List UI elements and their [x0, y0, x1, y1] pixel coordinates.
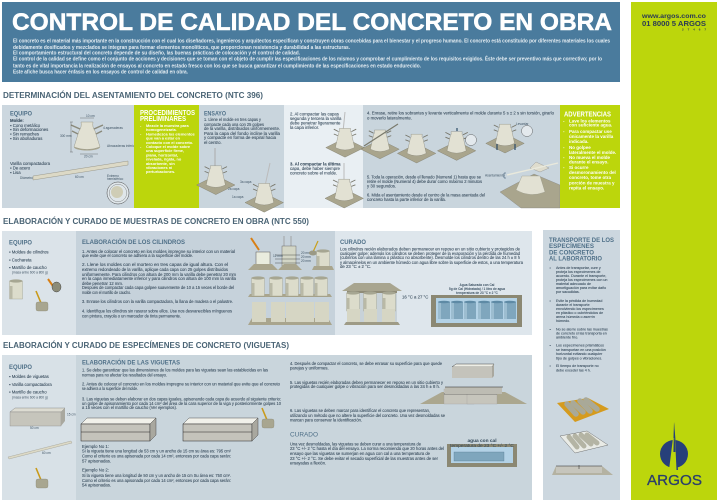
icon: two-layer beam A — [81, 418, 156, 441]
panel: equipo — [9, 240, 61, 311]
transport bullet list: Evite la pérdida de humedad — [556, 299, 602, 303]
panel: cylinder samples — [2, 231, 532, 335]
text: elaboración de las viguetas: Ejemplo No 2: — [82, 468, 109, 472]
icon: beam mold: 15 cm — [67, 412, 76, 416]
text: elaboración de los cilindros: ELABORACIÓN DE LOS CILINDROS — [82, 237, 186, 246]
text: steps 4 to 6: 4. Después de compactar el concreto, se debe enrasar su superficie para que quede — [290, 361, 443, 366]
transport title — [549, 237, 614, 262]
icon: row of cylinders on base — [248, 302, 332, 325]
icon: rod end detail: hemisférico — [107, 177, 124, 181]
icon: layers cross section: 1a capa — [232, 195, 244, 199]
introduction text: tanto es de vital importancia la realización de ensayos al concreto en estado fresco con los que se busca garantizar el cumplimiento de las especificaciones en estado endurecido. — [13, 63, 422, 69]
panel: equipo: ▪ Martillo de caucho — [9, 265, 47, 270]
transport bullet list: amortiguación para evitar daño — [556, 286, 606, 290]
panel: ensayo step 1: ENSAYO — [204, 110, 226, 118]
transport bullet list: húmedo. — [556, 319, 570, 323]
contact details — [641, 14, 706, 32]
panel: equipo: ▪ Moldes de cilindros — [9, 249, 48, 254]
panel: advertencias: únicamente la varilla — [569, 134, 614, 139]
text: elaboración de las viguetas: se adhiera a la superficie del molde. — [82, 386, 138, 391]
icon: filling first mold — [248, 238, 278, 270]
panel: procedimientos preliminares: Humedezca los elementos — [146, 131, 195, 136]
text: curado viguetas: 23 °C +/- 2 °C hasta el día del ensayo. La norma recomienda que 20 horas antes del — [290, 446, 444, 451]
panel: equipo: ▪ De acero — [10, 166, 31, 170]
panel: advertencias: - — [563, 129, 565, 134]
icon: hold cone with rotation dial — [437, 128, 476, 160]
introduction text: El comportamiento estructural del concreto depende de su diseño, las buenas prácticas de colocación y el control de calidad. — [13, 51, 301, 57]
icon: mold cone: 10 cm — [86, 114, 95, 118]
text: elaboración de las viguetas: 54 apisonadas. — [82, 482, 111, 488]
transport title: DE CONCRETO — [549, 250, 594, 256]
text: steps 4 to 6: utilizando un método que no altere la superficie del concreto. Una vez desmoldadas se — [290, 413, 446, 418]
panel: equipo: Varilla compactadora — [10, 161, 51, 166]
illustration: beam curing tank: agua con cal — [467, 438, 497, 444]
contact details: www.argos.com.co — [641, 14, 706, 20]
text: curado viguetas — [290, 432, 444, 466]
panel: equipo: ▪ Lisa — [10, 170, 21, 175]
transport bullet list: horizontal evitando cualquier — [556, 352, 603, 356]
panel: procedimientos preliminares: PRELIMINARES — [140, 114, 186, 123]
panel: ensayo steps 4 to 6: y 30 segundos. — [367, 184, 396, 188]
transport bullet list: El tiempo de transporte no — [556, 364, 599, 368]
panel: equipo: ▪ Sin remaches — [10, 131, 39, 136]
introduction text — [13, 38, 610, 75]
icon: tamping rod: 60 cm — [42, 451, 51, 455]
text: elaboración de las viguetas: ELABORACIÓN DE LAS VIGUETAS — [82, 358, 181, 366]
panel: procedimientos preliminares: PROCEDIMIENTOS — [140, 108, 195, 117]
panel: equipo: ▪ Sin deformaciones — [10, 127, 48, 132]
text: steps 4 to 6 — [290, 361, 446, 422]
icon: beams on base — [552, 465, 613, 475]
transport bullet list: • — [550, 364, 552, 368]
text: elaboración de los cilindros: en la capa inmediatamente inferior y para cilindros con altura de 100 mm la varilla — [82, 276, 237, 281]
text: elaboración de las viguetas: 57 apisonadas. — [82, 458, 111, 464]
icon: Argos logo — [647, 422, 702, 489]
icon: rodding third layer — [325, 163, 363, 208]
icon: two-layer beam B — [183, 418, 258, 441]
main title: CONTROL DE CALIDAD DEL CONCRETO EN OBRA — [12, 9, 612, 36]
panel: ensayo step 1: Para la capa del fondo incline la varilla — [204, 131, 281, 136]
panel: procedimientos preliminares: vibraciones ni — [146, 165, 172, 170]
text: elaboración de las viguetas: 3. Las viguetas se deben elaborar en dos capas iguales, apisonando cada capa de acuerdo al siguiente criterio: — [82, 396, 281, 402]
icon: rod in cylinder: 20 mm — [301, 251, 311, 255]
panel: equipo: ▪ Cono metálico — [10, 123, 41, 128]
icon: cylinder mold — [10, 279, 22, 299]
text: curado cilindros — [340, 239, 524, 269]
text: curado viguetas: Una vez desmoldadas, las viguetas se deben curar a una temperatura de — [290, 442, 422, 446]
panel: ensayo steps 4 to 6: o moverlo lateralmente. — [367, 116, 412, 120]
introduction text: El control de la calidad se define como el conjunto de acciones y decisiones que se toman con el objeto de cumplir las especificaciones de los mismos y comprobar el cumplimiento de los requisitos exigidos. Éste debe ser preventivo más que correctivo; por lo — [13, 54, 602, 62]
icon: beam mold: 50 cm — [30, 426, 39, 430]
panel: advertencias: con suficiente agua. — [569, 122, 612, 128]
icon: strike off cone — [361, 124, 399, 159]
icon: beam mold — [10, 408, 76, 430]
panel: ensayo step 1: compacte cada una con 25 golpes — [204, 122, 264, 127]
transport bullet list: ambiente frío. — [556, 336, 578, 340]
text: steps 4 to 6: marcan para conservar la identificación. — [290, 418, 362, 422]
panel: advertencias: - — [563, 118, 565, 123]
icon: layers cross section: 2a capa — [228, 187, 240, 191]
transport bullet list: en plástico o cubriéndolos de — [556, 311, 603, 315]
text: elaboración de los cilindros: uniformemente. Para cilindros con altura de 200 mm la varilla debe penetrar 20 mm — [82, 272, 236, 277]
icon: rod in cylinder: 20 mm — [301, 255, 311, 259]
text: elaboración de los cilindros: 4. Identifique los cilindros sin rasurar sobre ellos. Use nos desvanecibles mínguenos — [82, 308, 232, 314]
panel: equipo: ▪ Cuchareta — [9, 257, 32, 262]
panel: advertencias: Si ocurre — [569, 165, 589, 170]
text: elaboración de las viguetas: un golpe de apisonamiento por cada 14 cm² del área de la cara superior de la viga y posteriormente golpes 10 — [82, 401, 282, 406]
panel: equipo: ▪ Martillo de caucho — [9, 390, 47, 394]
panel: ensayo steps 4 to 6: concreto hasta la parte inferior de la varilla. — [367, 197, 446, 202]
text: elaboración de los cilindros: que evite que el concreto se adhiera a la superficie del molde. — [82, 253, 193, 258]
text: elaboración de los cilindros — [82, 237, 237, 318]
transport bullet list: material adecuado de — [556, 282, 591, 286]
text: curado cilindros: de 23 °C ± 2 °C. — [340, 264, 371, 269]
header banner — [2, 2, 620, 82]
text: curado viguetas: ensayadas a flexión. — [290, 460, 326, 466]
transport bullet list: se transportan en una posición — [556, 348, 606, 352]
transport bullet list: arena húmeda o aserrín — [556, 315, 595, 319]
transport bullet list: por sacudidas. — [556, 290, 580, 294]
panel: ensayo steps 2 and 3: debe penetrar ligeramente — [290, 120, 341, 126]
panel: equipo: ▪ Sin abolladuras — [10, 136, 42, 141]
transport bullet list: envolviendo los especímenes — [556, 307, 604, 311]
text: curado viguetas: 23 °C +/- 2 °C. Se debe evitar el secado superficial de las muestras antes de ser — [290, 456, 439, 461]
panel: advertencias — [560, 105, 620, 208]
text: curado cilindros: CURADO — [340, 239, 366, 246]
panel: advertencias: - — [563, 165, 565, 170]
icon: tamping rod: 60 cm — [75, 175, 84, 179]
green brand column — [631, 2, 717, 500]
icon: mold cone: 20 cm — [84, 154, 93, 158]
text: curado cilindros: y almacénelos en un ambiente húmedo con agua libre sobre la superficie de estos, a una temperatura — [340, 260, 524, 265]
illustration: curing tank: 5g de Cal (Hidratada) / 1 litro de agua — [449, 287, 505, 291]
icon: rodding second layer — [326, 112, 364, 157]
icon: beams resting on base — [420, 387, 527, 404]
panel: slump test — [2, 105, 620, 212]
panel: procedimientos preliminares: - — [140, 123, 142, 128]
panel: equipo: ▪ Varilla compactadora — [9, 382, 52, 387]
icon: rubber mallet — [36, 291, 48, 311]
text: elaboración de las viguetas: 1. Se debe garantizar que las dimensiones de los moldes para las viguetas sean las establecidas en las — [82, 368, 268, 372]
panel: procedimientos preliminares — [134, 105, 199, 208]
text: elaboración de los cilindros: con pintura, crayola o un marcador de tinta permanente. — [82, 314, 181, 318]
icon: row of cylinders — [248, 276, 332, 297]
illustration: shelter with cylinders — [342, 283, 428, 325]
panel: advertencias: lateralmente el molde. — [569, 150, 616, 155]
icon: rod in cylinder: 12 mm — [273, 254, 283, 258]
contact details: 27467 — [682, 28, 706, 32]
text: elaboración de los cilindros: extremo redondeado de la varilla, aplique cada capa con 25 golpes distribuidos — [82, 267, 228, 272]
panel: ensayo steps 4 to 6 — [361, 110, 560, 208]
panel: procedimientos preliminares: que van a estar en — [146, 136, 181, 141]
transport bullet list: Los especímenes prismáticos — [556, 344, 604, 348]
icon: rod end detail — [107, 174, 129, 204]
panel: equipo: (masa entre 600 a 800 g) — [12, 271, 48, 275]
panel: advertencias: ADVERTENCIAS — [564, 110, 611, 118]
introduction text: El concreto es el material más importante en la construcción con el cual los diseñadores, ingenieros y arquitectos especifican y construyen obras concebidas para el bienestar y el progreso humano. El concreto está constituido por diferentes materiales los cuales — [13, 38, 610, 44]
transport title: TRANSPORTE DE LOS — [549, 237, 614, 244]
contact details: 01 8000 5 ARGOS — [642, 21, 706, 28]
text: curado cilindros: cualquier golpe; además los cilindros se deben proteger de la evaporación y la pérdida de humedad — [340, 251, 521, 256]
icon: struck-off beam — [452, 364, 494, 378]
panel: ensayo step 1 — [197, 110, 283, 212]
icon: layers cross section: 3a capa — [240, 180, 252, 184]
panel: ensayo steps 2 and 3: segunda y tercera la varilla — [290, 116, 342, 121]
transport title: AL LABORATORIO — [549, 256, 602, 262]
panel: equipo — [10, 110, 139, 204]
icon: mold cone: 4 agarraderas — [103, 126, 123, 130]
text: curado cilindros: (cubrirlos con una lámina o plástico no absorbente). Desmolde los cilindros dentro de las 24 h ± 8 h — [340, 255, 521, 260]
icon: lifting cone: Levantar — [516, 122, 529, 126]
icon: Argos logo: ARGOS — [647, 472, 702, 489]
panel: ensayo step 1: el centro. — [204, 140, 222, 145]
transport bullet list — [550, 266, 608, 372]
text: elaboración de las viguetas: Como el criterio es una apisonada por cada 14 cm², entonces por cada capa serán: — [82, 478, 231, 483]
panel: ensayo steps 2 and 3: capa, debe haber siempre — [290, 166, 341, 171]
panel: advertencias: - — [563, 155, 565, 160]
panel: equipo: EQUIPO — [9, 240, 32, 246]
transport bullet list: • — [550, 266, 552, 270]
icon: measuring slump — [485, 162, 560, 208]
text: elaboración de los cilindros: debe penetrar 12 mm. — [82, 281, 123, 286]
panel: ensayo steps 2 and 3: la capa inferior. — [290, 125, 319, 130]
transport bullet list: Antes de transportar, cure y — [556, 266, 601, 270]
panel: advertencias: concreto, tome otra — [569, 175, 612, 180]
section heading: viguetas: ELABORACIÓN Y CURADO DE ESPECÍMENES DE CONCRETO (VIGUETAS) — [3, 339, 289, 350]
panel: ensayo steps 4 to 6: retire el molde (Numeral 4) debe durar como máximo 2 minutos — [367, 179, 482, 184]
icon: scoop — [48, 279, 61, 292]
section heading: asentamiento: DETERMINACIÓN DEL ASENTAMIENTO DEL CONCRETO (NTC 396) — [3, 89, 263, 100]
panel: ensayo steps 2 and 3: 2. Al compactar las capas — [290, 112, 339, 116]
panel: ensayo step 1: 1. Llene el molde en tres capas y — [204, 117, 262, 122]
transport bullet list: No se aterre sobre las muestras — [556, 328, 608, 332]
panel: equipo: ▪ Moldes de viguetas — [9, 374, 49, 379]
icon: rodding first layer — [197, 148, 235, 195]
text: curado viguetas: CURADO — [290, 432, 318, 438]
panel: advertencias: porción de muestra y — [569, 180, 615, 185]
illustration: curing tank: temperatura de 23 °C ± 2 °C — [456, 291, 499, 295]
panel: procedimientos preliminares: perturbaciones. — [146, 169, 175, 174]
text: elaboración de las viguetas: Si la vigueta tiene una longitud de 53 cm y un ancho de 15 cm su área es: 795 cm² — [82, 448, 232, 454]
panel: ensayo step 1: y compacte en forma de espiral hacia — [204, 135, 277, 140]
icon: lifting cone — [486, 122, 532, 153]
text: elaboración de las viguetas: Si la vigueta tiene una longitud de 50 cm y un ancho de 15 cm Su área es: 750 cm². — [82, 473, 231, 478]
icon: rod in cylinder — [273, 236, 311, 270]
panel: ensayo steps 2 and 3: concreto sobre el molde. — [290, 170, 337, 176]
panel: advertencias: repita el ensayo. — [569, 186, 604, 191]
text: elaboración de los cilindros: Después de compactar cada capa golpee suavemente de 10 a 15 veces el borde del — [82, 285, 234, 290]
transport title: ESPECÍMENES — [549, 241, 594, 250]
panel: ensayo steps 2 and 3 — [290, 112, 364, 208]
text: elaboración de las viguetas: Ejemplo No 1: — [82, 444, 109, 449]
transport bullet list: • — [550, 299, 552, 303]
panel: equipo: Diámetro: 1" — [20, 176, 38, 180]
icon: measuring slump: Asentamiento — [485, 174, 505, 178]
icon: wrapped cylinders — [560, 431, 608, 453]
transport bullet list: • — [550, 328, 552, 332]
panel: procedimientos preliminares: - — [140, 131, 142, 136]
transport bullet list: debe exceder las 4 h. — [556, 368, 591, 372]
text: elaboración de los cilindros: 1. Antes de colocar el concreto en los moldes impregne su interior con un material — [82, 249, 235, 254]
introduction text: Este afiche busca hacer énfasis en los ensayos de control de calidad en obra. — [13, 69, 189, 75]
icon: rod end detail: Extremo — [107, 174, 119, 178]
text: elaboración de las viguetas: normas para no afectar los resultados del ensayo. — [82, 372, 167, 378]
panel: equipo: EQUIPO — [9, 364, 32, 371]
transport bullet list: • — [550, 344, 552, 348]
icon: mold cone: 300 mm — [60, 134, 72, 138]
panel: procedimientos preliminares: nivelada, rígida, no — [146, 157, 182, 162]
panel: advertencias: No golpee — [569, 145, 591, 150]
panel: equipo: Molde: — [10, 118, 24, 123]
text: elaboración de los cilindros: 2. Llene los moldes con el mortero en tres capas de igual altura. Con el — [82, 262, 228, 267]
panel: ensayo step 1: de la varilla, distribuidos uniformemente. — [204, 126, 280, 131]
illustration: shelter with cylinders: 16 °C a 27 °C — [402, 294, 428, 300]
text: steps 4 to 6: 5. Las viguetas recién elaboradas deben permanecer en reposo en un sitio cubierto y — [290, 380, 444, 385]
illustration: beam curing tank: temperatura de 23 °C +/- 2 °C — [450, 443, 514, 449]
illustration: cylinder process — [248, 236, 334, 325]
section heading: cilindros: ELABORACIÓN Y CURADO DE MUESTRAS DE CONCRETO EN OBRA (NTC 550) — [3, 215, 309, 226]
panel: advertencias: No mueva el molde — [569, 155, 611, 160]
icon: mold cone: Abrazaderas inferiores — [107, 144, 139, 148]
icon: rod in cylinder: 20 mm — [301, 259, 311, 263]
panel: transporte — [543, 230, 620, 500]
panel: procedimientos preliminares: Mezcle la muestra para — [146, 123, 189, 128]
panel: procedimientos preliminares: absorbente, sin — [146, 161, 175, 166]
icon: layers cross section — [228, 163, 283, 212]
text: elaboración de las viguetas: 2. Antes de colocar el concreto en los moldes impregne su interior con un material que evite que el concreto — [82, 382, 281, 386]
icon: cylinders in tray — [557, 398, 609, 422]
panel: advertencias: indicada. — [569, 139, 589, 144]
panel: equipo — [8, 364, 76, 488]
panel: ensayo steps 4 to 6: 5. Toda la operación, desde el llenado (Numeral 1) hasta que se — [367, 174, 482, 180]
panel: equipo: EQUIPO — [10, 110, 32, 118]
transport bullet list: durante el transporte — [556, 303, 590, 307]
panel: beam samples — [2, 355, 532, 500]
transport bullet list: acuerdo. Durante el transporte, — [556, 274, 606, 278]
panel: ensayo steps 4 to 6: 4. Enrase, retire los sobrantes y levante verticalmente el molde durante 5 s ± 2 s sin torsión, girarlo — [367, 110, 555, 116]
introduction text: debidamente dosificados y mezclados se integran para formar elementos monolíticos, que proporcionan resistencia y durabilidad a las estructuras. — [13, 45, 351, 51]
text: elaboración de los cilindros: 3. Enrase los cilindros con la varilla compactadora, la llana de madera o el palustre. — [82, 299, 233, 304]
panel: advertencias: durante el ensayo. — [569, 159, 609, 164]
icon: mallet on mold — [309, 241, 334, 270]
transport bullet list: proteja los especímenes de — [556, 270, 601, 274]
panel: equipo: (masa entre 600 a 800 g) — [12, 396, 48, 400]
panel: ensayo steps 4 to 6: 6. Mida el asentamiento desde el centro de la masa asentada del — [367, 192, 485, 198]
panel: procedimientos preliminares: plana, horizontal, — [146, 152, 178, 157]
text: curado viguetas: ensayo que las viguetas se sumerjan en agua con cal a una temperatura de — [290, 451, 431, 456]
icon: mold cone — [60, 114, 139, 158]
panel: ensayo steps 2 and 3: 3. Al compactar la última — [290, 162, 341, 166]
panel: advertencias: Lave los elementos — [569, 118, 611, 123]
transport bullet list: tipo de golpes o vibraciones. — [556, 356, 602, 360]
text: elaboración de las viguetas: Como el criterio es una apisonada por cada 14 cm², entonces por cada capa serán: — [82, 454, 231, 458]
text: elaboración de las viguetas — [81, 358, 282, 488]
panel: procedimientos preliminares: Coloque el molde sobre — [146, 144, 191, 149]
icon: clean cone — [397, 134, 436, 163]
text: elaboración de las viguetas: a 15 veces con el martillo de caucho (Ver ejemplos). — [82, 405, 177, 410]
transport bullet list: proteja los especímenes con un — [556, 278, 607, 282]
text: steps 4 to 6: protegidas de cualquier golpe o vibración para ser desmoldadas a las 24 h ± 8 h. — [290, 384, 440, 389]
illustration: beam curing tank — [447, 438, 517, 467]
text: elaboración de los cilindros: molde con el martillo de caucho. — [82, 290, 131, 295]
panel: procedimientos preliminares: - — [140, 144, 142, 149]
panel: procedimientos preliminares: homogeneizarla. — [146, 127, 177, 132]
panel: advertencias: Para compactar use — [569, 129, 612, 134]
panel: advertencias: - — [563, 145, 565, 150]
text: curado cilindros: Los cilindros recién elaborados deben permanecer en reposo en un sitio cubierto y protegidos de — [340, 246, 521, 252]
illustration: curing tank: Agua Saturada con Cal — [460, 283, 495, 287]
illustration: curing tank — [431, 283, 522, 327]
text: steps 4 to 6: parejas y uniformes. — [290, 366, 329, 370]
transport bullet list: de concreto si las transporta en — [556, 332, 607, 336]
icon: rubber mallet — [36, 468, 48, 488]
panel: advertencias: desmoronamiento del — [569, 170, 616, 175]
icon: mallet on beam — [262, 408, 274, 428]
text: steps 4 to 6: 6. Las viguetas se deben marcar para identificar el concreto que representan, — [290, 408, 430, 413]
panel: procedimientos preliminares: una superficie firme, — [146, 148, 184, 153]
panel: procedimientos preliminares: contacto con el concreto. — [146, 140, 193, 145]
